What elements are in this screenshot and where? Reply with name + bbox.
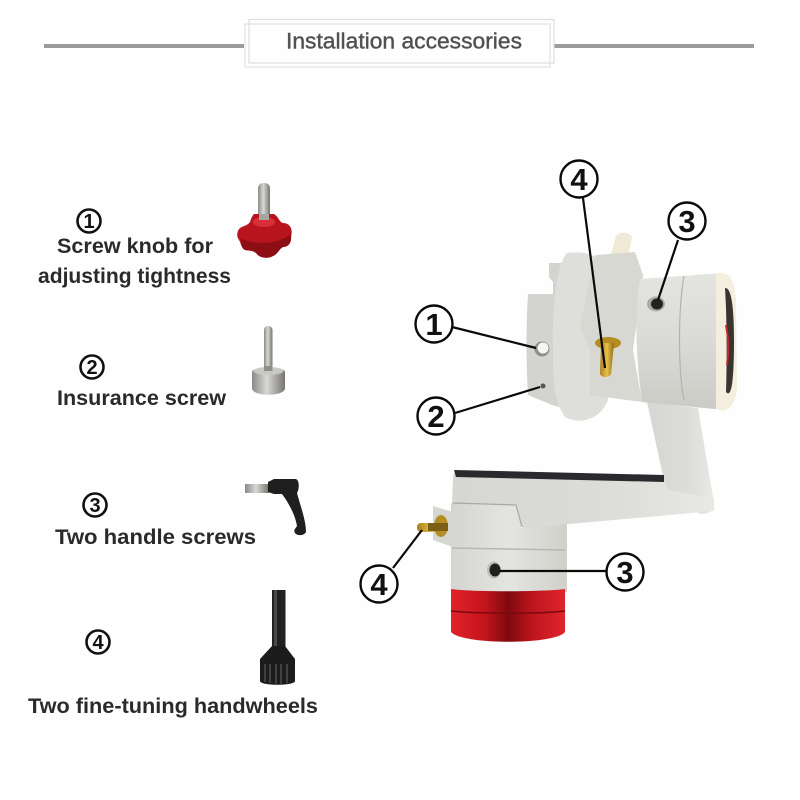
brass handwheel, lower — [417, 515, 448, 537]
item 2: insurance screw — [57, 326, 285, 410]
center wedge — [580, 252, 643, 402]
base cylinder — [451, 503, 567, 592]
red base ring — [451, 589, 565, 642]
icon: black handle screw — [245, 479, 306, 535]
vertical arm — [647, 402, 714, 514]
icon: black handwheel — [260, 590, 295, 685]
callout 3, lower: 3 — [616, 555, 634, 590]
callout leader lines — [393, 198, 678, 571]
right cylinder — [636, 273, 725, 410]
hole for knob — [534, 342, 550, 356]
item 1: screw knob — [38, 183, 292, 288]
callout 4, upper — [560, 160, 598, 198]
brass handwheel, upper — [595, 337, 621, 377]
lens ring — [716, 273, 737, 410]
section heading: Installation accessories: Installation accessories — [286, 28, 522, 54]
label: screw knob: Screw knob for — [57, 234, 214, 258]
section heading: Installation accessories — [44, 20, 754, 67]
number badge 3 — [84, 494, 106, 517]
rear mounting plate — [526, 263, 580, 410]
upper handle hole — [647, 296, 665, 312]
number badge 4: 4 — [92, 632, 104, 654]
icon: silver insurance screw — [252, 326, 285, 395]
number badge 2 — [80, 356, 104, 379]
icon: red screw knob — [237, 183, 292, 258]
item 3: handle screws — [55, 479, 306, 549]
callout 1: 1 — [425, 307, 443, 342]
camera stem — [611, 233, 632, 256]
label: handle screws: Two handle screws — [55, 525, 256, 549]
item 4: fine-tuning handwheels — [28, 590, 318, 718]
dark arm top strip — [454, 470, 664, 482]
label: screw knob — [38, 234, 231, 288]
label: screw knob: adjusting tightness — [38, 264, 231, 288]
number badge 3: 3 — [89, 495, 101, 517]
label: handwheels: Two fine-tuning handwheels — [28, 694, 318, 718]
callout 1 — [416, 306, 452, 342]
callout 4, lower: 4 — [370, 567, 388, 602]
hole for insurance screw — [540, 384, 546, 388]
lower handle hole — [487, 562, 501, 578]
callout 2: 2 — [427, 399, 445, 434]
number badge 2: 2 — [86, 357, 98, 379]
number badge 4 — [86, 630, 110, 654]
callout 4, upper: 4 — [570, 162, 588, 197]
callout 4, lower — [360, 566, 398, 602]
callout 2 — [418, 398, 454, 434]
arm step edge — [453, 503, 522, 527]
horizontal arm — [452, 471, 714, 528]
callout 3, upper — [668, 202, 706, 240]
callout 3, upper: 3 — [678, 204, 696, 239]
gimbal head product photo — [417, 233, 737, 642]
callout 3, lower — [606, 554, 644, 590]
clamp block with handwheel mount — [433, 506, 453, 547]
number badge 1: 1 — [83, 211, 95, 233]
number badge 1 — [78, 210, 100, 233]
label: insurance screw: Insurance screw — [57, 386, 226, 410]
main disk — [553, 253, 608, 421]
